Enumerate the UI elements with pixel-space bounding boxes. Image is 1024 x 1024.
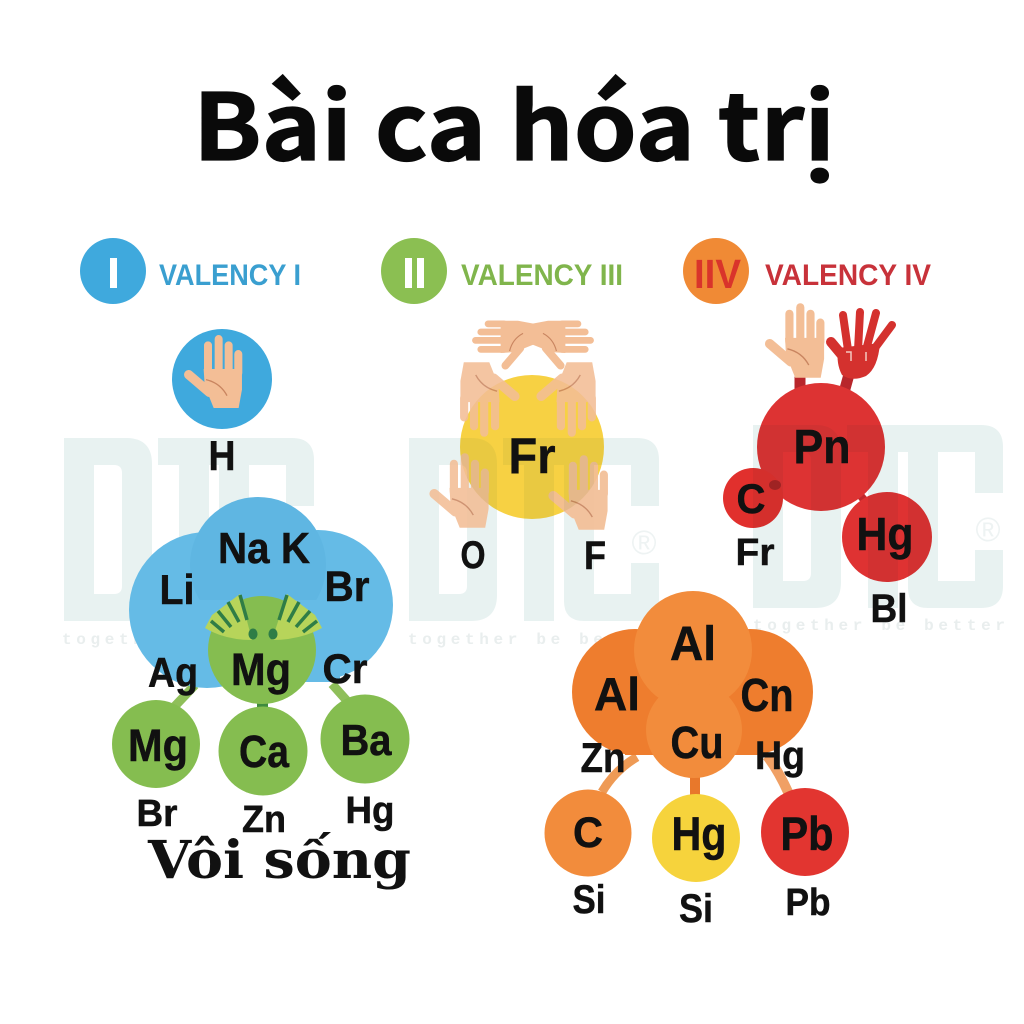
panel: blue and green cluster: Na K bbox=[218, 524, 310, 573]
panel: yellow atom with hands bbox=[434, 321, 608, 530]
legend: valency IV bbox=[683, 238, 931, 304]
panel: red atoms bbox=[723, 307, 932, 582]
labels: yellow and red atoms: Fr bbox=[508, 428, 556, 484]
panel: blue and green cluster: Ca bbox=[239, 726, 290, 777]
legend: valency IV: VALENCY IV bbox=[765, 259, 931, 292]
labels: yellow and red atoms: F bbox=[584, 534, 606, 578]
panel: orange cluster: Si bbox=[679, 887, 713, 931]
panel: orange cluster: Si bbox=[572, 878, 606, 922]
panel: blue and green cluster: Ag bbox=[148, 649, 198, 696]
panel: blue and green cluster: Hg bbox=[346, 790, 394, 832]
panel: blue and green cluster: Li bbox=[160, 566, 194, 613]
labels: yellow and red atoms: Pn bbox=[794, 421, 850, 474]
panel: orange cluster: Al bbox=[670, 618, 716, 671]
panel: orange cluster: Hg bbox=[672, 807, 726, 860]
caption: Vôi sống: Vôi sống bbox=[147, 830, 411, 891]
panel: blue and green cluster: Mg bbox=[128, 720, 188, 771]
panel: blue and green cluster: Br bbox=[136, 793, 178, 835]
panel: orange cluster bbox=[544, 591, 849, 931]
legend: valency IV: IIV bbox=[694, 251, 742, 297]
panel: blue and green cluster bbox=[112, 497, 410, 841]
watermark: ® bbox=[631, 524, 657, 562]
panel: orange cluster: Cn bbox=[740, 669, 794, 721]
panel: orange cluster: Pb bbox=[786, 882, 830, 924]
panel: blue and green cluster: Cr bbox=[322, 645, 368, 692]
icon: green hands bbox=[205, 594, 322, 640]
watermark: ® bbox=[286, 524, 312, 562]
panel: hydrogen hand bbox=[172, 329, 272, 479]
panel: orange cluster: Al bbox=[594, 668, 640, 720]
labels: yellow and red atoms bbox=[460, 421, 914, 631]
panel: blue and green cluster: Br bbox=[324, 563, 370, 611]
labels: yellow and red atoms: O bbox=[460, 534, 486, 577]
labels: yellow and red atoms: Hg bbox=[856, 508, 914, 560]
watermark: together be better bbox=[62, 631, 314, 649]
icon: skin hand bbox=[770, 307, 824, 378]
legend: valency I bbox=[80, 238, 301, 304]
panel: blue and green cluster: Ba bbox=[340, 716, 392, 765]
panel: orange cluster: Pb bbox=[780, 807, 834, 860]
watermark: ® bbox=[975, 511, 1001, 549]
labels: yellow and red atoms: Bl bbox=[870, 587, 908, 631]
labels: yellow and red atoms: C bbox=[736, 475, 766, 522]
panel: hydrogen hand: H bbox=[208, 432, 236, 479]
watermark bbox=[62, 425, 1005, 649]
legend: valency III: VALENCY III bbox=[461, 259, 623, 292]
title: Bài ca hóa trị bbox=[193, 54, 835, 187]
legend: valency I: VALENCY I bbox=[159, 259, 301, 292]
panel: orange cluster: Cu bbox=[670, 717, 724, 768]
panel: orange cluster: Zn bbox=[580, 734, 626, 781]
panel: orange cluster: Hg bbox=[755, 734, 805, 778]
watermark: together be better bbox=[408, 631, 660, 649]
labels: yellow and red atoms: Fr bbox=[736, 532, 775, 574]
panel: blue and green cluster: Zn bbox=[242, 799, 286, 841]
icon: red hand bbox=[831, 312, 892, 379]
watermark: together be better bbox=[753, 617, 1005, 635]
legend: valency III bbox=[381, 238, 623, 304]
panel: orange cluster: C bbox=[573, 809, 603, 857]
panel: blue and green cluster: Mg bbox=[231, 644, 291, 695]
watermark overlay on atoms bbox=[460, 425, 932, 582]
